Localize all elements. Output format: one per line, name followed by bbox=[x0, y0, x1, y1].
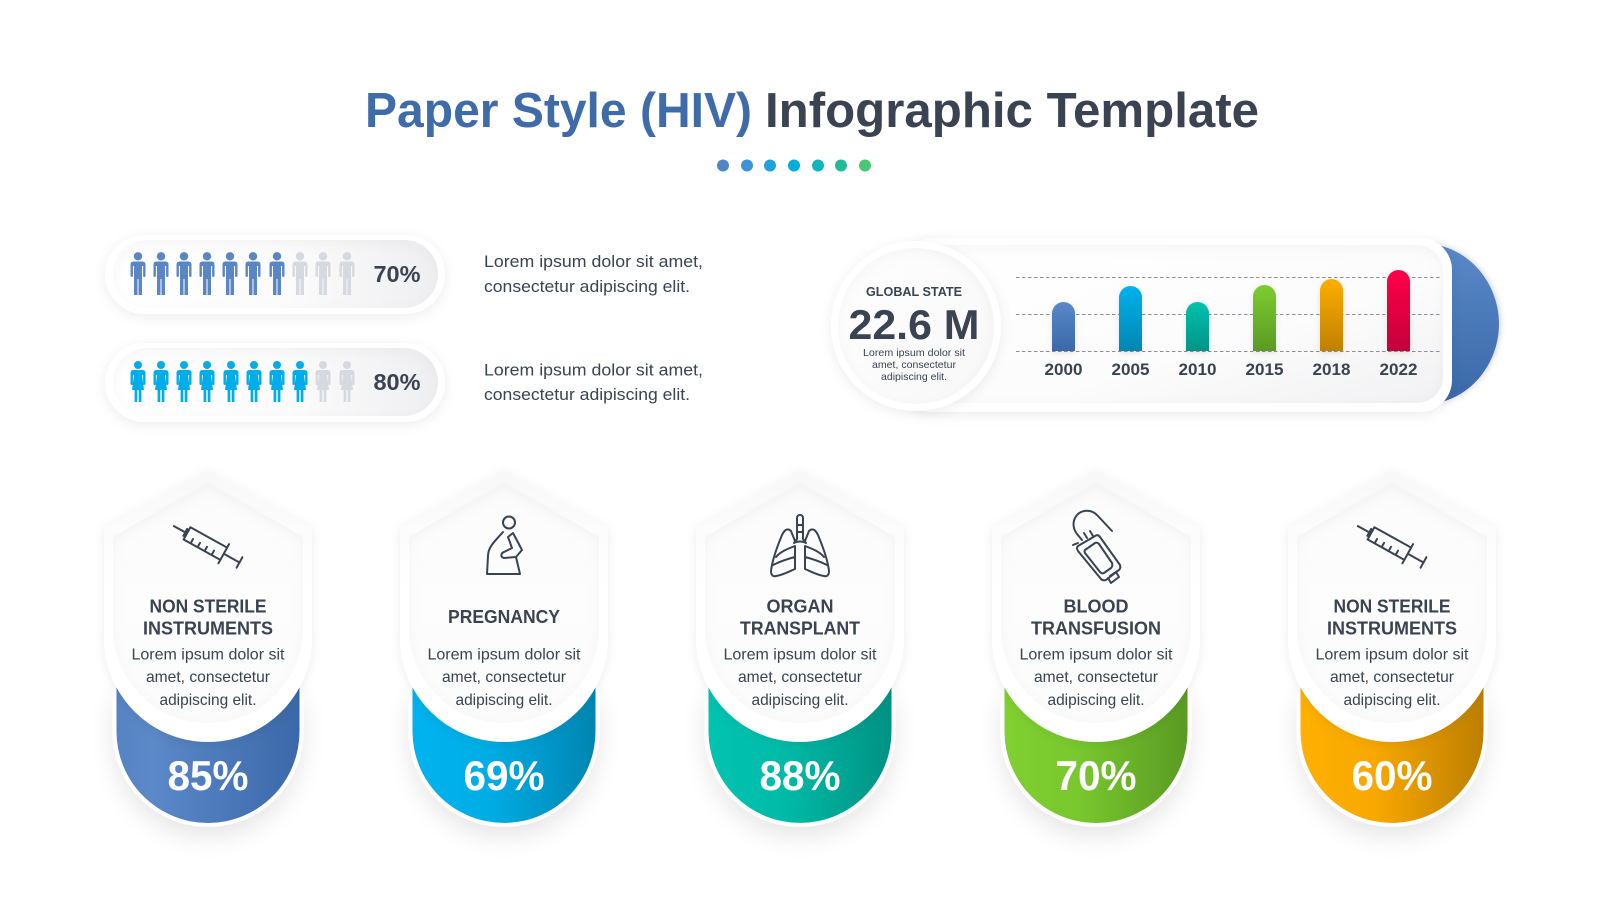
body text: Lorem ipsum dolor sit bbox=[724, 646, 877, 664]
blue half circle bbox=[1430, 244, 1499, 404]
text: female description: Lorem ipsum dolor sit amet, bbox=[484, 360, 703, 380]
body text bbox=[724, 646, 877, 709]
title: Infographic Template bbox=[765, 84, 1259, 138]
body text: amet, consectetur bbox=[1034, 669, 1159, 686]
heading: PREGNANCY bbox=[448, 607, 560, 627]
value: 60% bbox=[1352, 752, 1432, 799]
body text bbox=[132, 646, 285, 709]
body text: amet, consectetur bbox=[146, 669, 271, 686]
body text: adipiscing elit. bbox=[752, 692, 848, 709]
body text: adipiscing elit. bbox=[160, 692, 256, 709]
panel: card non sterile instruments 85%: INSTRUMENTS bbox=[143, 618, 273, 638]
title bbox=[365, 84, 1259, 138]
body text: adipiscing elit. bbox=[1344, 692, 1440, 709]
body text bbox=[428, 646, 581, 709]
value: 70% bbox=[1056, 752, 1136, 799]
female pictogram row bbox=[130, 361, 354, 402]
title dots bbox=[717, 160, 871, 172]
year labels: 2015 bbox=[1246, 360, 1284, 379]
body text: amet, consectetur bbox=[442, 669, 567, 686]
heading: NON STERILE bbox=[1334, 596, 1450, 616]
global state circle: GLOBAL STATE bbox=[866, 284, 962, 299]
global state circle: Lorem ipsum dolor sit bbox=[863, 347, 965, 359]
body text: Lorem ipsum dolor sit bbox=[132, 646, 285, 664]
male pictogram row bbox=[130, 252, 354, 295]
year labels: 2000 bbox=[1044, 360, 1082, 379]
body text: adipiscing elit. bbox=[1048, 692, 1144, 709]
heading: ORGAN bbox=[766, 596, 834, 616]
body text: Lorem ipsum dolor sit bbox=[1316, 646, 1469, 664]
body text bbox=[1020, 646, 1173, 709]
title: Paper Style (HIV) bbox=[365, 84, 752, 138]
panel: card blood transfusion 70%: TRANSFUSION bbox=[1031, 618, 1161, 638]
heading: NON STERILE bbox=[150, 596, 266, 616]
year labels: 2022 bbox=[1380, 360, 1418, 379]
value: 85% bbox=[168, 752, 248, 799]
year labels bbox=[1044, 360, 1418, 379]
panel: card organ transplant 88% bbox=[696, 470, 904, 827]
value 70%: 70% bbox=[374, 261, 420, 287]
global state circle: adipiscing elit. bbox=[881, 371, 947, 383]
panel: card pregnancy 69% bbox=[400, 470, 608, 827]
icon: syringe bbox=[169, 516, 245, 572]
year labels: 2018 bbox=[1312, 360, 1350, 379]
year labels: 2010 bbox=[1178, 360, 1216, 379]
panel: card non sterile instruments 60% bbox=[1288, 470, 1496, 827]
text: male description: consectetur adipiscing elit. bbox=[484, 277, 690, 296]
text: male description bbox=[484, 252, 703, 296]
global state circle: amet, consectetur bbox=[872, 359, 956, 371]
icon: syringe bbox=[1353, 516, 1429, 572]
value: 69% bbox=[464, 752, 544, 799]
panel: card blood transfusion 70% bbox=[992, 470, 1200, 827]
panel: global state chart bbox=[831, 238, 1499, 412]
text: female description: consectetur adipiscing elit. bbox=[484, 385, 690, 404]
body text: amet, consectetur bbox=[738, 669, 863, 686]
bar chart bbox=[1016, 270, 1440, 379]
year labels: 2005 bbox=[1112, 360, 1150, 379]
panel: card organ transplant 88%: TRANSPLANT bbox=[740, 618, 860, 638]
text: male description: Lorem ipsum dolor sit amet, bbox=[484, 252, 703, 271]
panel: card non sterile instruments 60%: INSTRUMENTS bbox=[1327, 618, 1457, 638]
icon: pregnant woman bbox=[487, 516, 522, 574]
value 80%: 80% bbox=[374, 369, 420, 395]
icon: blood bag bbox=[1073, 511, 1120, 583]
panel: male 70% pill bbox=[105, 235, 445, 314]
body text bbox=[1316, 646, 1469, 709]
icon: lungs bbox=[771, 515, 829, 576]
global state circle: 22.6 M bbox=[848, 301, 980, 348]
body text: adipiscing elit. bbox=[456, 692, 552, 709]
heading: BLOOD bbox=[1064, 596, 1128, 616]
body text: amet, consectetur bbox=[1330, 669, 1455, 686]
panel: female 80% pill bbox=[105, 343, 445, 422]
body text: Lorem ipsum dolor sit bbox=[428, 646, 581, 664]
value: 88% bbox=[760, 752, 840, 799]
global state circle bbox=[831, 241, 1001, 411]
panel: card non sterile instruments 85% bbox=[104, 470, 312, 827]
text: female description bbox=[484, 360, 703, 404]
body text: Lorem ipsum dolor sit bbox=[1020, 646, 1173, 664]
